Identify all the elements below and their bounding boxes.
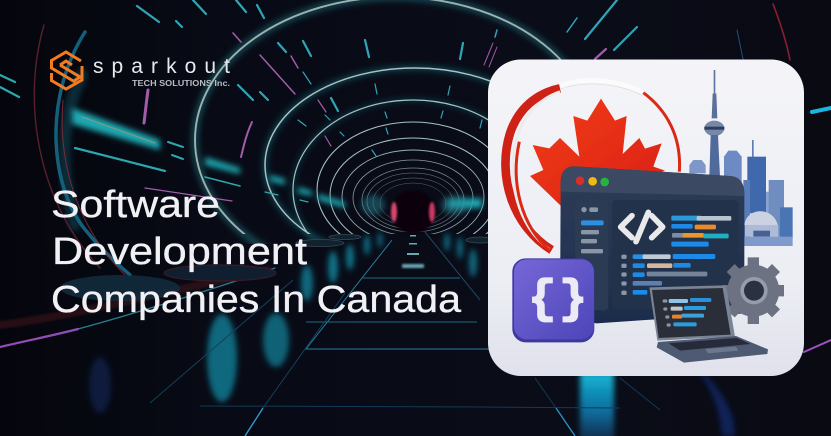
tunnel sharp rings [194, 0, 562, 234]
icon: curly braces tile: } [559, 274, 587, 326]
tunnel vanishing point [361, 190, 469, 234]
icon: gear [723, 257, 784, 324]
window control dots [576, 176, 609, 186]
floor reflections [89, 232, 477, 413]
icon: toronto skyline [689, 70, 793, 246]
right edge streaks [804, 108, 831, 352]
panel: illustration card [488, 60, 804, 376]
teal wall streaks sharp [0, 75, 308, 202]
icon: curly braces tile: { [529, 274, 556, 326]
code lines [621, 216, 731, 295]
icon: red ring [505, 80, 680, 251]
title: Development [52, 231, 307, 273]
left outer arcs [0, 25, 275, 347]
logo [52, 52, 230, 89]
top dashes: cyan and magenta [137, 0, 790, 201]
icon: maple leaf [530, 99, 665, 207]
title: Companies In Canada [51, 279, 462, 321]
illustration drawn in 3x zoom coordinates [505, 70, 793, 363]
floor light panels [402, 235, 424, 268]
floating platforms [60, 234, 494, 301]
floor grid lines [150, 232, 660, 436]
reflection below card [580, 372, 735, 436]
code tag symbol [621, 212, 663, 242]
panel: code window [560, 166, 744, 323]
teal wall streaks [72, 108, 482, 208]
window sidebar [575, 199, 608, 310]
code editor pane [612, 200, 739, 309]
logo tagline: TECH SOLUTIONS Inc. [132, 79, 230, 88]
icon: sparkout hexagon [52, 52, 82, 89]
logo wordmark: sparkout [93, 55, 230, 78]
icon: curly braces tile [512, 258, 594, 342]
tunnel ring glow [188, 0, 570, 244]
title [51, 184, 462, 321]
title: Software [51, 184, 220, 226]
icon: laptop [649, 285, 768, 363]
